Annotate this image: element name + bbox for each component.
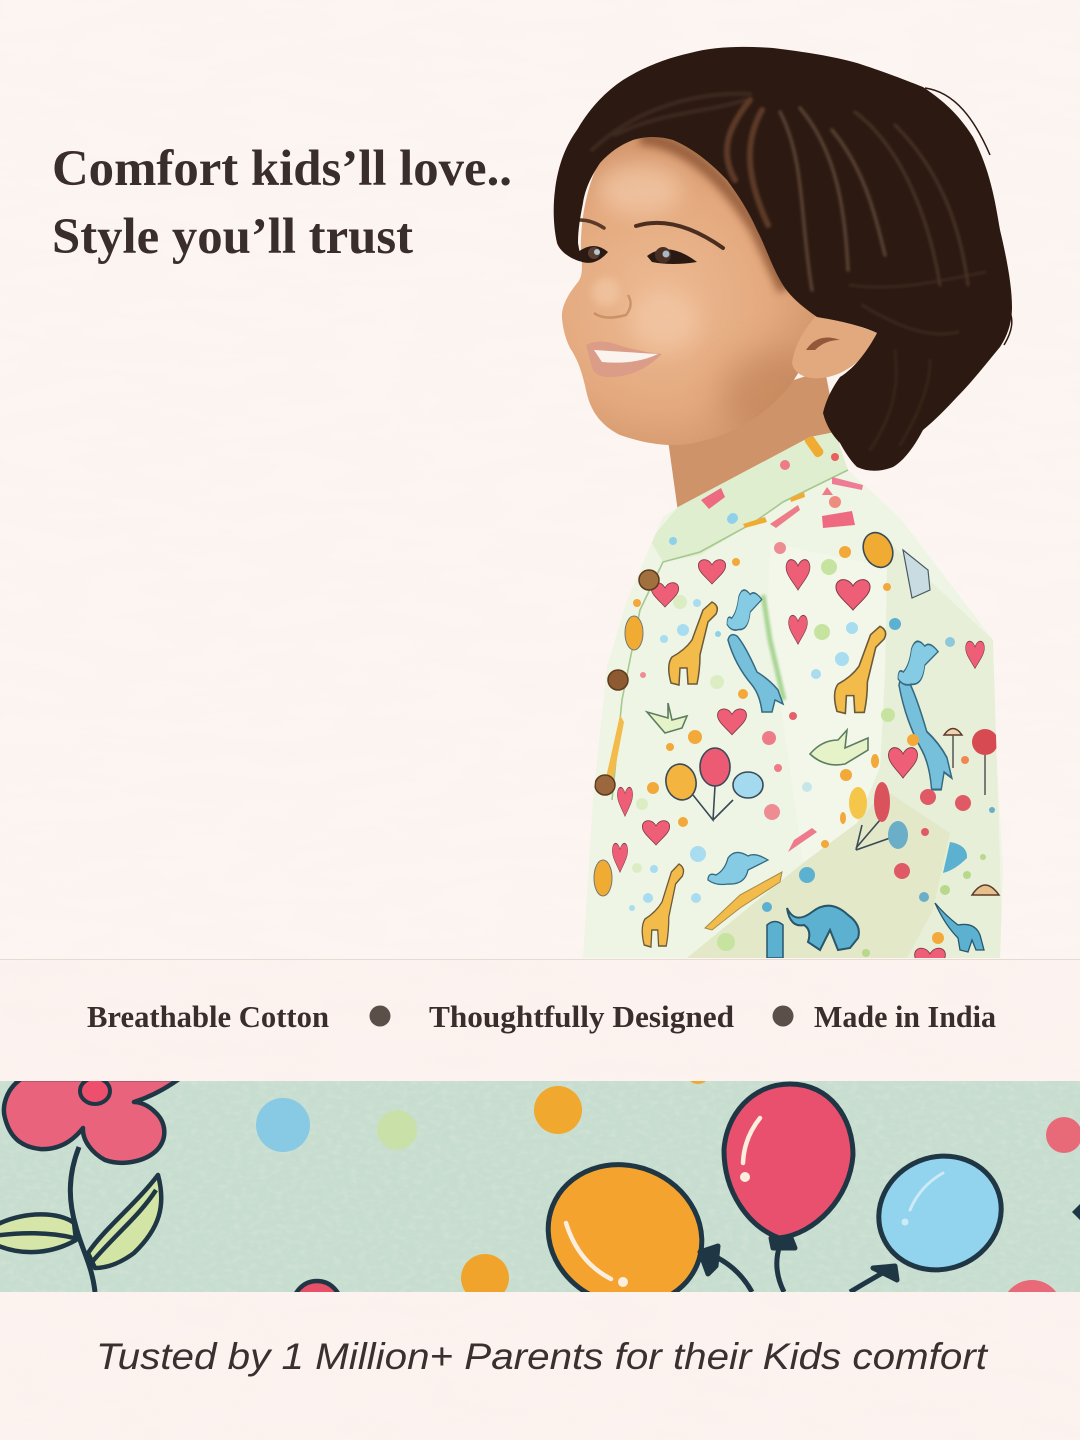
features strip: Made in India <box>814 999 996 1034</box>
dinosaurs print <box>728 635 783 712</box>
trust line: Tusted by 1 Million+ Parents for their Kids comfort <box>96 1336 989 1377</box>
elephants print <box>727 590 762 630</box>
headline: Style you’ll trust <box>52 209 413 265</box>
headline <box>52 141 512 265</box>
shirt <box>583 432 1003 958</box>
balloons <box>546 1082 1004 1292</box>
eyes and brows <box>578 220 723 264</box>
dots print <box>629 513 995 957</box>
balloons print <box>663 528 898 850</box>
hair strands <box>592 94 985 450</box>
flower <box>0 1078 179 1292</box>
mushrooms print <box>944 728 999 895</box>
balloon highlights <box>566 1118 943 1287</box>
headline: Comfort kids’ll love.. <box>52 141 512 197</box>
features strip <box>0 959 1080 1081</box>
dots <box>256 1098 310 1152</box>
collar <box>650 432 848 562</box>
smile <box>586 342 662 377</box>
ear <box>792 315 877 378</box>
fabric print band <box>0 1081 1080 1292</box>
birds print <box>647 703 868 765</box>
giraffes print <box>669 602 717 685</box>
features strip: Thoughtfully Designed <box>429 999 734 1034</box>
collar print <box>701 433 863 528</box>
child photo <box>554 47 1020 975</box>
sleeve and back shading <box>858 545 1002 958</box>
flower print <box>788 729 998 852</box>
neck <box>668 370 840 512</box>
features strip: Breathable Cotton <box>87 999 329 1034</box>
hair <box>554 47 1012 471</box>
hearts print <box>836 580 870 610</box>
face <box>562 130 830 445</box>
bottom strip <box>0 1292 1080 1440</box>
shirt buttons <box>595 570 659 795</box>
